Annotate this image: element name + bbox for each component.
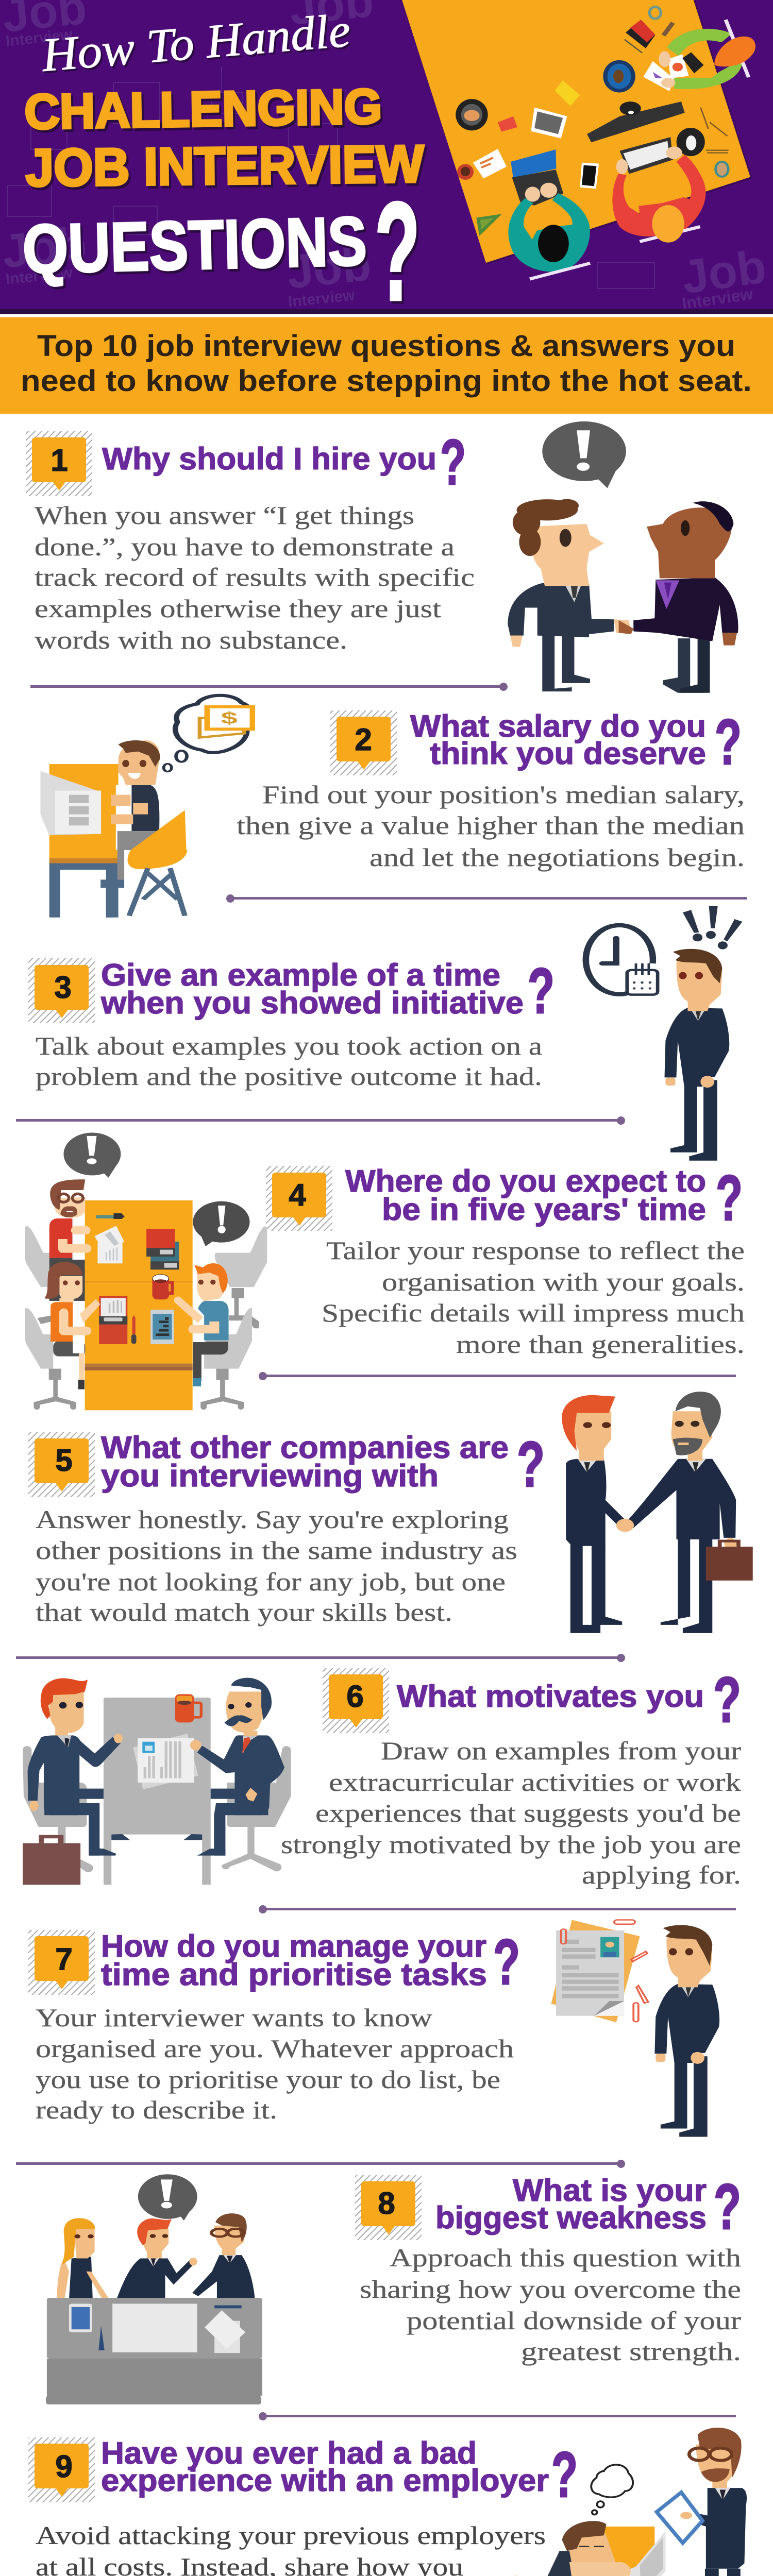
desk (47, 2298, 262, 2396)
body text 6: applying for. (582, 1860, 741, 1889)
table (104, 1698, 211, 1835)
body text 8: Approach this question with (390, 2243, 741, 2272)
panel: question 5 (16, 1392, 753, 1662)
icon: laptop (599, 2531, 665, 2576)
icon: exclamation marks (683, 906, 743, 950)
icon: briefcase (706, 1541, 753, 1581)
icon: tablet (150, 1310, 174, 1344)
heading 4 (345, 1164, 706, 1227)
body text 3: Talk about examples you took action on a (36, 1031, 542, 1060)
heading 8 (435, 2173, 707, 2235)
panel: question 1 (26, 421, 738, 693)
body text 5: other positions in the same industry as (36, 1536, 517, 1565)
icon: mouse (677, 128, 705, 156)
body text 8: greatest strength. (521, 2337, 741, 2366)
icon: thought cloud (164, 696, 253, 772)
icon: thought cloud (591, 2465, 633, 2515)
background watermark: Interview (287, 286, 356, 311)
illustration: team meeting (25, 1133, 267, 1410)
heading 3: when you showed initiative (100, 986, 524, 1020)
icon: teal person (508, 183, 590, 279)
number tag 6: 6 (346, 1679, 364, 1714)
body text 8: sharing how you overcome the (360, 2275, 741, 2303)
heading 8: What is your (513, 2173, 707, 2208)
body text 1: When you answer “I get things (35, 501, 414, 530)
number tag 1: 1 (51, 443, 68, 478)
icon: chart card and red cup (457, 149, 507, 180)
divider (16, 1116, 625, 1125)
icon: books (146, 1229, 179, 1269)
subtitle line 1: Top 10 job interview questions & answers you (37, 329, 735, 363)
icon: speech bubble (63, 1133, 121, 1178)
divider (30, 683, 508, 691)
heading 3 (100, 958, 524, 1020)
heading 7: How do you manage your (101, 1929, 486, 1963)
body text 5: that would match your skills best. (36, 1598, 452, 1626)
body text 7: ready to describe it. (36, 2095, 277, 2124)
panel: question 6 (23, 1665, 741, 1913)
man with beard (49, 1179, 91, 1301)
number tag 1 (26, 431, 92, 496)
heading 5: you interviewing with (101, 1459, 439, 1493)
number tag 2: 2 (355, 722, 372, 757)
desk (584, 2527, 654, 2576)
icon: papers (94, 1226, 124, 1263)
body text 6: extracurricular activities or work (329, 1768, 741, 1797)
number tag 6 (323, 1668, 389, 1733)
icon: yellow card (554, 80, 580, 106)
subtitle line 2: need to know before stepping into the hot seat. (21, 364, 752, 398)
body text 1 (35, 501, 475, 654)
left man (28, 1735, 121, 1856)
body text 6: strongly motivated by the job you are (281, 1830, 741, 1859)
heading 9: Have you ever had a bad (101, 2436, 477, 2470)
number tag 2 (330, 710, 397, 775)
icon: keyboard (619, 137, 673, 174)
background watermark: Interview (5, 264, 74, 288)
icon: blue plate (603, 60, 635, 92)
body text 6: experiences that suggests you'd be (315, 1799, 741, 1827)
body text 4: Tailor your response to reflect the (326, 1236, 745, 1265)
icon: clipboard (99, 1296, 136, 1344)
body text 4: organisation with your goals. (382, 1267, 745, 1296)
number tag 4 (266, 1166, 332, 1231)
question mark: ? (493, 1927, 520, 1998)
subtitle band (0, 317, 773, 414)
heading 5 (101, 1430, 509, 1493)
illustration: clock, calendar, standing man (586, 906, 743, 1161)
body text 4 (322, 1236, 745, 1359)
illustration: handshake (508, 421, 738, 693)
illustration: desk worker thinking of money (40, 696, 253, 918)
woman (57, 2218, 109, 2308)
background watermark: Job (284, 238, 374, 299)
divider (16, 1654, 625, 1662)
illustration: papers and man (551, 1920, 719, 2137)
panel: question 9 (16, 2428, 747, 2576)
panel: question 8 (46, 2172, 741, 2420)
icon: phone (580, 163, 599, 189)
divider (16, 2160, 625, 2168)
body text 4: Specific details will impress much (322, 1298, 745, 1327)
right chair (222, 1746, 291, 1871)
body text 8: potential downside of your (407, 2306, 741, 2335)
body text 5: Answer honestly. Say you're exploring (36, 1505, 509, 1534)
heading 4: be in five years' time (382, 1192, 706, 1227)
question mark: ? (551, 2439, 578, 2511)
number tag 8: 8 (378, 2186, 395, 2221)
illustration: sleeping worker and boss (509, 2428, 747, 2576)
icon: green person (667, 20, 755, 89)
chair (509, 2575, 572, 2576)
body text 7: you use to prioritise your to do list, be (36, 2065, 500, 2094)
background watermark: Interview (5, 26, 74, 50)
body text 7 (36, 2003, 514, 2124)
heading 3: Give an example of a time (101, 958, 500, 992)
title: Job Interview: JOB INTERVIEW (25, 134, 425, 197)
background watermark (0, 0, 769, 313)
heading 9: experience with an employer (101, 2463, 549, 2498)
heading 9 (101, 2436, 549, 2498)
background watermark: Job (0, 217, 89, 278)
icon: papers (643, 52, 703, 91)
heading 2: think you deserve (430, 736, 706, 771)
body text 1: examples otherwise they are just (35, 594, 441, 623)
icon: clock (586, 925, 658, 995)
background watermark: Interview (681, 284, 754, 313)
question mark: ? (440, 427, 466, 498)
icon: man (664, 949, 729, 1161)
question mark: ? (517, 1429, 545, 1500)
icon: monitor (587, 101, 685, 142)
illustration: team at a desk (47, 2174, 262, 2396)
question mark: ? (715, 707, 742, 778)
divider (259, 2412, 736, 2420)
man pointing (114, 2218, 197, 2309)
icon: red person (612, 146, 705, 243)
number tag 4: 4 (289, 1178, 306, 1212)
title: question mark: ? (375, 173, 420, 330)
table illustration (401, 0, 755, 279)
heading 4: Where do you expect to (345, 1164, 706, 1198)
body text 1: words with no substance. (35, 625, 347, 654)
heading 8: biggest weakness (435, 2200, 707, 2235)
icon: tablet (531, 108, 567, 139)
icon: red block (498, 116, 517, 132)
panel: question 7 (16, 1920, 719, 2168)
body text 5 (36, 1505, 517, 1626)
number tag 3 (28, 958, 95, 1023)
divider (226, 894, 747, 903)
panel: question 3 (16, 906, 743, 1161)
heading 7 (101, 1929, 487, 1992)
icon: thought cloud: $ (221, 708, 238, 727)
number tag 3: 3 (54, 970, 72, 1005)
icon: man (654, 1925, 719, 2137)
man with orange hair (174, 1263, 229, 1386)
sleeping man (537, 2521, 631, 2576)
heading 7: time and prioritise tasks (101, 1957, 487, 1992)
body text 6: Draw on examples from your (381, 1736, 741, 1765)
number tag 7: 7 (55, 1942, 73, 1976)
number tag 5 (28, 1432, 95, 1497)
icon: speech bubble (138, 2174, 197, 2221)
body text 8 (360, 2243, 741, 2366)
heading 2: What salary do you (410, 709, 706, 743)
body text 5: you're not looking for any job, but one (36, 1567, 506, 1596)
left chair (23, 1746, 93, 1872)
heading 6: What motivates you (397, 1679, 704, 1714)
question mark: ? (716, 1163, 743, 1234)
question mark: ? (714, 2172, 741, 2243)
heading 2 (410, 709, 706, 771)
body text 9 (36, 2521, 546, 2576)
body text 2: Find out your position's median salary, (262, 780, 745, 809)
icon: ring (649, 7, 661, 19)
number tag 7 (28, 1930, 95, 1995)
heading 1: Why should I hire you (102, 442, 436, 476)
woman (44, 1262, 100, 1389)
body text 2: then give a value higher than the median (237, 811, 745, 840)
right man (197, 1735, 284, 1856)
illustration: two men shaking hands (562, 1392, 753, 1633)
number tag 9 (28, 2437, 95, 2502)
icon: pens and cup (701, 108, 729, 177)
number tag 9: 9 (55, 2449, 73, 2484)
icon: pen (96, 1213, 125, 1219)
icon: notebook (625, 20, 673, 53)
body text 4: more than generalities. (456, 1330, 745, 1359)
body text 1: track record of results with specific (35, 563, 475, 591)
body text 1: done.”, you have to demonstrate a (35, 532, 455, 561)
number tag 5: 5 (55, 1443, 73, 1478)
body text 6 (281, 1736, 741, 1889)
body text 3: problem and the positive outcome it had. (36, 1062, 542, 1091)
icon: speech bubble (542, 421, 626, 488)
icon: set square (478, 216, 498, 233)
icon: laptop (511, 149, 563, 206)
icon: mug (152, 1275, 174, 1299)
divider (259, 1372, 736, 1380)
heading 5: What other companies are (101, 1430, 509, 1465)
desk lower part (46, 2396, 261, 2404)
number tag 8 (355, 2175, 422, 2240)
question mark: ? (713, 1665, 741, 1736)
question mark: ? (528, 956, 554, 1027)
icon: speech bubble (193, 1201, 250, 1246)
panel: question 2 (40, 696, 747, 918)
panel: question 4 (25, 1133, 745, 1410)
hero banner (0, 0, 773, 330)
body text 2: and let the negotiations begin. (369, 843, 745, 872)
body text 2 (237, 780, 745, 872)
icon: document (133, 1734, 198, 1789)
title: Questions: QUESTIONS (22, 203, 368, 288)
title: Challenging: CHALLENGING (24, 79, 382, 140)
title: How To Handle: How To Handle (39, 4, 352, 81)
body text 3 (36, 1031, 542, 1091)
icon: dark plate (456, 99, 488, 130)
body text 7: organised are you. Whatever approach (36, 2034, 514, 2063)
icon: mug (175, 1694, 201, 1722)
icon: briefcase (23, 1835, 80, 1885)
man with glasses (192, 2213, 255, 2299)
icon: papers with clips (551, 1920, 648, 2023)
icon: boss (657, 2428, 747, 2576)
illustration: interview at a table (23, 1678, 291, 1885)
body text 9: Avoid attacking your previous employers (36, 2521, 546, 2550)
body text 7: Your interviewer wants to know (36, 2003, 432, 2032)
background watermark: Job (679, 240, 769, 304)
divider (259, 1905, 736, 1913)
